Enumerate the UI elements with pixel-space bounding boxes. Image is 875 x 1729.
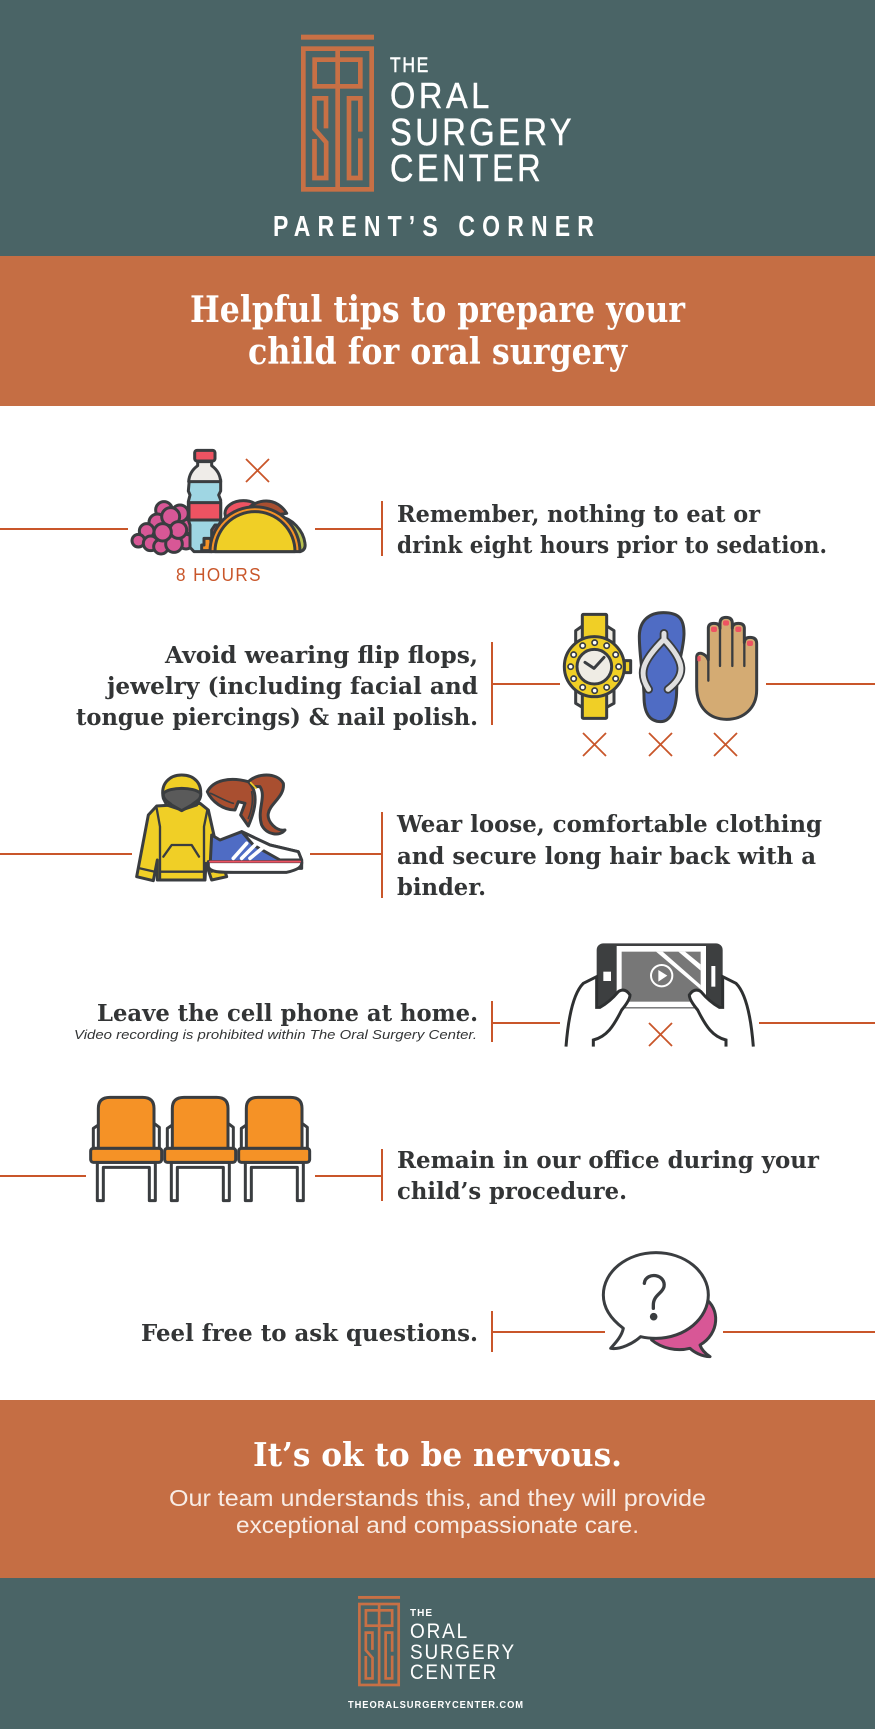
icon: logo (301, 35, 374, 189)
tip text: Remain in our office during your (397, 1146, 820, 1174)
footer wordmark: ORAL (410, 1620, 469, 1643)
subtitle: PARENT’S CORNER (273, 211, 601, 243)
tip text: tongue piercings) & nail polish. (76, 703, 478, 731)
logo wordmark: CENTER (390, 148, 544, 190)
footer wordmark: SURGERY (410, 1641, 516, 1664)
icon: hand (697, 617, 757, 719)
tip text (397, 500, 827, 559)
icon: cross (649, 1023, 672, 1046)
tip text: Remember, nothing to eat or (397, 500, 761, 528)
icon: watch (564, 614, 631, 718)
body text (169, 1485, 706, 1538)
icon: flip flop (639, 613, 684, 722)
footer wordmark: CENTER (410, 1661, 498, 1684)
tip text: child’s procedure. (397, 1177, 627, 1205)
footer wordmark: THE (410, 1608, 433, 1619)
panel: title banner (0, 256, 875, 406)
icon: shoe (208, 832, 302, 872)
tip text (76, 641, 478, 731)
panel: reassurance (0, 1400, 875, 1578)
note: Video recording is prohibited within The Oral Surgery Center. (74, 1028, 477, 1042)
tip 5: remain in office (0, 1097, 820, 1205)
tip 4: leave the phone at home (74, 943, 875, 1048)
icon: cross (246, 459, 269, 482)
logo wordmark: SURGERY (390, 112, 575, 154)
panel: footer (0, 1578, 875, 1729)
panel: header (0, 0, 875, 256)
icon: phone in hands (565, 943, 755, 1048)
label: 8 hours: 8 HOURS (176, 565, 262, 585)
heading (190, 289, 686, 373)
icon: hair (207, 775, 285, 834)
tip text: binder. (397, 873, 486, 901)
icon: speech bubbles (603, 1253, 716, 1357)
website: THEORALSURGERYCENTER.COM (348, 1700, 524, 1711)
tip text: Wear loose, comfortable clothing (396, 810, 822, 838)
body text: Our team understands this, and they will provide (169, 1485, 706, 1511)
icon: hoodie (137, 775, 227, 881)
icon: hoodie, hair, shoe (137, 775, 302, 881)
tip text: Avoid wearing flip flops, (164, 641, 478, 669)
heading: It’s ok to be nervous. (253, 1435, 622, 1474)
tip text: and secure long hair back with a (397, 842, 816, 870)
heading: Helpful tips to prepare your (190, 289, 686, 331)
tip 2: avoid flip flops, jewelry, polish (76, 613, 875, 756)
chair 1 (91, 1097, 162, 1201)
logo wordmark: THE (390, 54, 430, 77)
body text: exceptional and compassionate care. (236, 1512, 639, 1538)
tip text (397, 1146, 820, 1205)
tip text: Leave the cell phone at home. (97, 999, 478, 1027)
icon: chairs (91, 1097, 310, 1201)
icons: crosses (583, 733, 737, 756)
chair 3 (239, 1097, 310, 1201)
tip 6: ask questions (141, 1253, 875, 1357)
tip text: Feel free to ask questions. (141, 1319, 478, 1347)
tip text (396, 810, 822, 901)
tip 3: loose clothing (0, 775, 822, 901)
tip text: jewelry (including facial and (105, 672, 478, 700)
icon: food and drink (132, 450, 305, 554)
heading: child for oral surgery (248, 331, 628, 373)
tip 1: nothing to eat or drink (0, 450, 827, 585)
icon: footer logo (358, 1596, 400, 1685)
chair 2 (165, 1097, 236, 1201)
tip text: drink eight hours prior to sedation. (397, 531, 827, 559)
footer wordmark (410, 1608, 516, 1684)
logo wordmark (390, 54, 575, 190)
icon: watch, flip flop, hand (564, 613, 757, 722)
logo wordmark: ORAL (390, 75, 493, 116)
